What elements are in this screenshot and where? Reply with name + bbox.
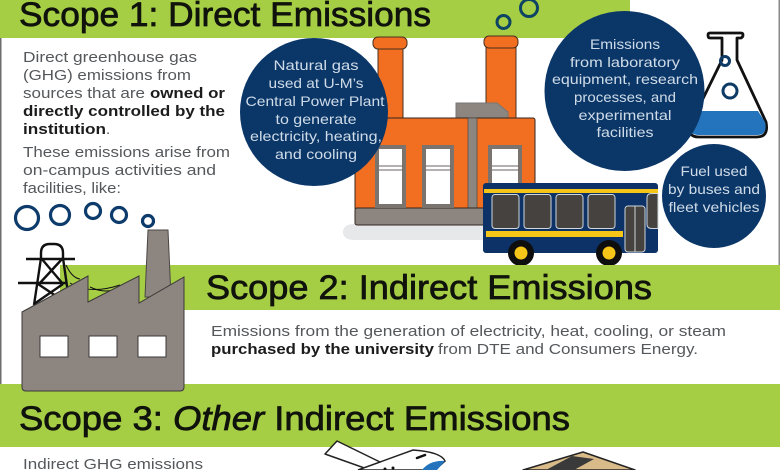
callout: laboratory emissions: equipment, research — [552, 71, 698, 87]
text block: scope 1 description: (GHG) emissions from — [23, 67, 191, 84]
callout: laboratory emissions: experimental — [578, 107, 672, 123]
callout: laboratory emissions: processes, and — [574, 89, 676, 105]
icon: factory building — [22, 276, 184, 391]
text block: scope 1 description: directly controlled by the — [23, 103, 225, 120]
icon: smoke rings from power plant — [497, 0, 538, 28]
text block: scope 2 description — [211, 323, 726, 358]
icon: power plant — [343, 36, 535, 240]
text block: scope 2 description: from DTE and Consumers Energy. — [438, 341, 698, 358]
text block: scope 1 description: on-campus activities and — [23, 162, 216, 179]
icon: bus — [483, 183, 658, 266]
panel: scope 2 — [60, 265, 780, 358]
text block: scope 1 description: Direct greenhouse gas — [23, 49, 197, 66]
callout: natural gas: and cooling — [275, 146, 357, 162]
heading band: scope 3 — [0, 384, 780, 447]
callout: natural gas: Natural gas — [274, 57, 358, 73]
callout: fleet fuel: Fuel used — [680, 163, 748, 179]
heading band: scope 2: Scope 2: Indirect Emissions — [206, 269, 652, 307]
text block: scope 1 description: sources that are — [23, 85, 145, 102]
panel: scope 3 — [0, 384, 780, 470]
text block: scope 1 description: owned or — [150, 85, 225, 102]
callout: natural gas — [240, 38, 388, 186]
heading band: scope 2 — [60, 265, 780, 310]
text block: scope 2 description: purchased by the university — [211, 341, 435, 358]
callout: laboratory emissions: from laboratory — [570, 54, 680, 70]
icon: smoke rings from factory — [16, 204, 154, 230]
heading band: scope 3: Scope 3: Other Indirect Emissions — [19, 400, 570, 438]
text block: scope 1 description — [23, 49, 230, 197]
callout: natural gas: used at U-M’s — [268, 75, 364, 91]
text block: scope 1 description: These emissions arise from — [23, 144, 230, 161]
text block: scope 1 description: . — [106, 121, 110, 138]
icon: factory with transmission tower — [16, 204, 184, 391]
icon: airplane — [325, 441, 445, 470]
text block: scope 1 description: facilities, like: — [23, 180, 121, 197]
heading band: scope 1 — [0, 0, 630, 38]
text block: scope 1 description: institution — [23, 121, 106, 138]
callout: natural gas: Central Power Plant — [246, 93, 385, 109]
callout: fleet fuel: fleet vehicles — [668, 199, 760, 215]
callout: fleet fuel — [662, 144, 766, 248]
panel: scope 1 — [0, 0, 767, 266]
callout: fleet fuel: by buses and — [668, 181, 760, 197]
callout: natural gas: electricity, heating, — [250, 128, 382, 144]
callout: laboratory emissions: Emissions — [590, 36, 660, 52]
icon: transmission tower — [18, 244, 122, 305]
callout: natural gas: to generate — [276, 111, 357, 127]
text block: scope 2 description: Emissions from the generation of electricity, heat, cooling, or steam — [211, 323, 726, 340]
callout: laboratory emissions — [544, 11, 704, 171]
icon: factory chimney — [145, 230, 171, 297]
icon: laboratory flask — [690, 33, 767, 137]
callout: laboratory emissions: facilities — [596, 124, 654, 140]
icon: cardboard box — [523, 452, 635, 470]
